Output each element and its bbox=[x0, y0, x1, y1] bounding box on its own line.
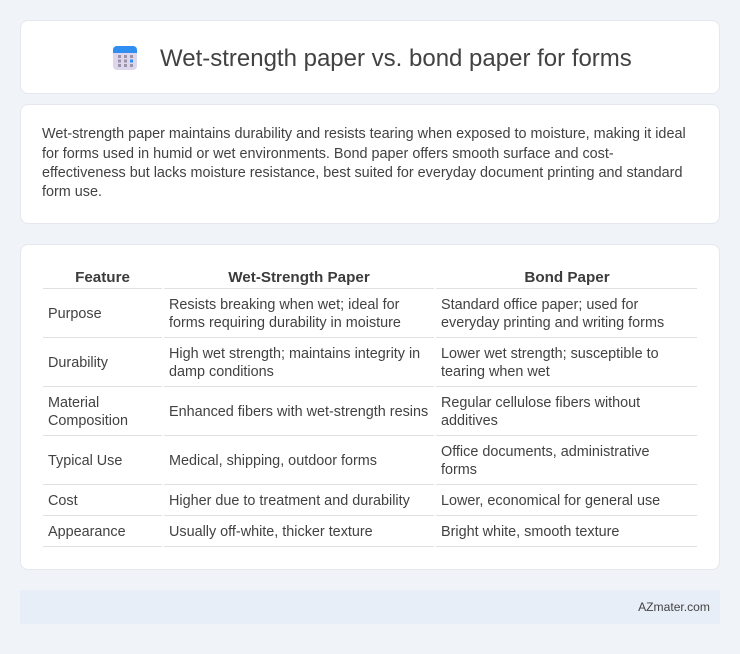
intro paragraph: form use. bbox=[42, 184, 102, 200]
row: purpose: Standard office paper; used for bbox=[441, 297, 638, 313]
table header row: Wet-Strength Paper bbox=[228, 269, 370, 286]
row: durability: Lower wet strength; susceptible to bbox=[441, 346, 659, 362]
footer source text: AZmater.com bbox=[638, 600, 710, 614]
row: typical use: Medical, shipping, outdoor forms bbox=[169, 453, 377, 469]
row: typical use: Office documents, administrative bbox=[441, 444, 650, 460]
row: durability bbox=[48, 346, 659, 380]
row: material composition: Regular cellulose fibers without bbox=[441, 395, 640, 411]
table header row: Feature bbox=[75, 269, 130, 286]
table header row: Bond Paper bbox=[524, 269, 610, 286]
row: material composition: additives bbox=[441, 413, 498, 429]
row: typical use: forms bbox=[441, 462, 477, 478]
intro paragraph bbox=[42, 126, 686, 200]
row: purpose bbox=[48, 297, 664, 331]
comparison table panel bbox=[20, 244, 720, 570]
title: Wet-strength paper vs. bond paper for forms bbox=[160, 45, 632, 72]
row: material composition: Material bbox=[48, 395, 99, 411]
row: purpose: Resists breaking when wet; ideal for bbox=[169, 297, 399, 313]
row: cost: Lower, economical for general use bbox=[441, 493, 660, 509]
row: purpose: forms requiring durability in moisture bbox=[169, 315, 401, 331]
row: purpose: Purpose bbox=[48, 306, 102, 322]
row: cost: Cost bbox=[48, 493, 78, 509]
row: typical use: Typical Use bbox=[48, 453, 122, 469]
row: durability: tearing when wet bbox=[441, 364, 550, 380]
row: appearance: Usually off-white, thicker texture bbox=[169, 524, 373, 540]
row: durability: High wet strength; maintains integrity in bbox=[169, 346, 420, 362]
row: typical use bbox=[48, 444, 650, 478]
icon: calendar bbox=[113, 46, 137, 70]
row: appearance bbox=[48, 524, 619, 540]
footer bar bbox=[20, 590, 720, 624]
row: cost: Higher due to treatment and durability bbox=[169, 493, 410, 509]
table header row bbox=[75, 269, 610, 286]
intro paragraph: Wet-strength paper maintains durability and resists tearing when exposed to moisture, making it ideal bbox=[42, 126, 686, 142]
row: appearance: Appearance bbox=[48, 524, 126, 540]
row: durability: Durability bbox=[48, 355, 108, 371]
row: cost bbox=[48, 493, 660, 509]
row: appearance: Bright white, smooth texture bbox=[441, 524, 619, 540]
row: purpose: everyday printing and writing forms bbox=[441, 315, 664, 331]
row: material composition: Enhanced fibers with wet-strength resins bbox=[169, 404, 428, 420]
row: durability: damp conditions bbox=[169, 364, 274, 380]
header card bbox=[20, 20, 720, 94]
intro paragraph: effectiveness but lacks moisture resistance, best suited for everyday document printing and standard bbox=[42, 165, 682, 181]
row: material composition bbox=[48, 395, 640, 429]
intro text panel bbox=[20, 104, 720, 224]
row: material composition: Composition bbox=[48, 413, 128, 429]
intro paragraph: for forms used in humid or wet environments. Bond paper offers smooth surface and cost- bbox=[42, 146, 614, 162]
